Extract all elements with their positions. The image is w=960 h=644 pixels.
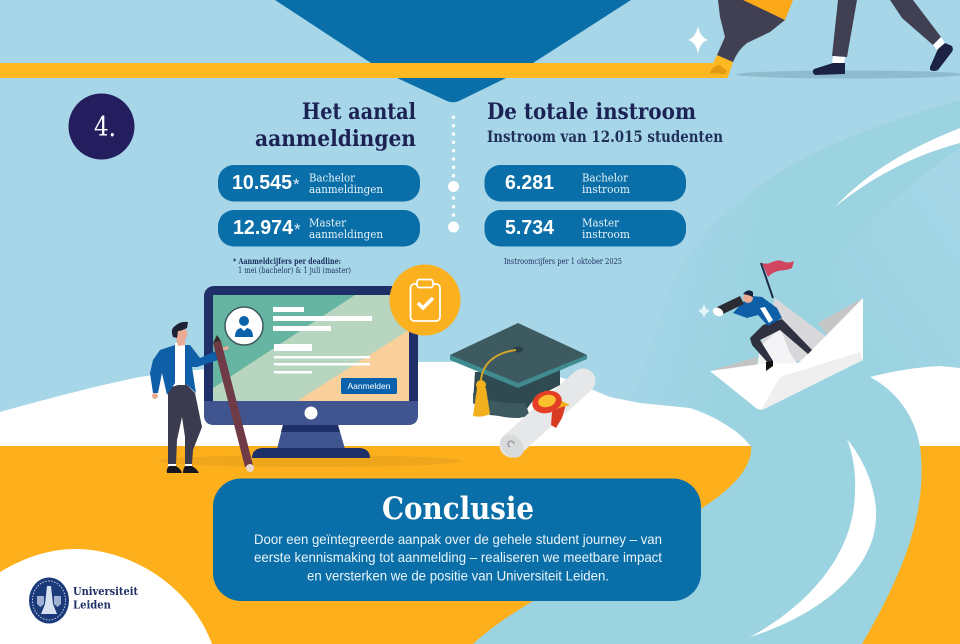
stat pill: bachelor intake: instroom (582, 182, 630, 196)
stat pill: bachelor intake (484, 165, 686, 202)
heading: applications (255, 99, 416, 152)
ground shadow (158, 455, 462, 467)
heading: total intake: Instroom van 12.015 studenten (487, 127, 723, 146)
footnote: applications: * Aanmeldcijfers per deadline: (233, 256, 341, 266)
top arrow shape (275, 0, 631, 102)
stat pill: master applications: Master (309, 216, 346, 230)
conclusion panel: Door een geïntegreerde aanpak over de gehele student journey – van (254, 531, 662, 547)
stat pill: master applications: 12.974 (233, 217, 294, 239)
stat pill: master intake: instroom (582, 227, 630, 241)
stat pill: bachelor applications: * (293, 175, 300, 194)
monitor illustration (204, 286, 418, 458)
graduation cap (450, 323, 587, 418)
logo: Universiteit Leiden: Universiteit (73, 584, 139, 598)
conclusion panel (213, 478, 701, 601)
stat pill: master applications: * (294, 220, 301, 239)
form lines (273, 307, 372, 374)
step number badge: 4. (94, 112, 116, 143)
walking legs with shadow (736, 0, 960, 78)
stat pill: master intake: Master (582, 216, 619, 230)
dotted divider (448, 116, 459, 232)
stat pill: bachelor intake: 6.281 (505, 172, 554, 194)
diploma scroll (496, 381, 583, 462)
conclusion panel: Conclusie (382, 491, 534, 527)
flag (761, 260, 794, 298)
heading: total intake: De totale instroom (487, 99, 696, 125)
heading: total intake (487, 99, 723, 146)
icon: small sparkle (698, 304, 710, 318)
stat pill: bachelor applications: aanmeldingen (309, 182, 384, 196)
stat pill: bachelor applications: 10.545 (232, 172, 292, 194)
stat pill: master applications: aanmeldingen (309, 227, 384, 241)
icon: highlighter marker (708, 0, 793, 77)
footnote: intake: Instroomcijfers per 1 oktober 2025 (504, 257, 622, 266)
conclusion panel: en versterken we de positie van Universiteit Leiden. (307, 568, 609, 584)
stat pill: bachelor intake: Bachelor (582, 170, 628, 184)
icon: clipboard badge (390, 264, 460, 336)
icon: sparkle (688, 26, 708, 54)
apply button (341, 378, 397, 394)
avatar (225, 307, 263, 345)
apply button: Aanmelden (347, 381, 391, 391)
footnote: applications (233, 256, 351, 275)
highlighter line (0, 63, 728, 78)
paper boat (710, 298, 863, 410)
conclusion panel: eerste kennismaking tot aanmelding – realiseren we meetbare impact (254, 549, 662, 565)
heading: applications: aanmeldingen (255, 126, 416, 152)
person with telescope on boat (711, 290, 812, 371)
stat pill: master intake: 5.734 (505, 217, 555, 239)
logo: Universiteit Leiden (29, 578, 139, 624)
stat pill: bachelor applications: Bachelor (309, 170, 355, 184)
footnote: applications: 1 mei (bachelor) & 1 juli (master) (238, 266, 351, 275)
stat pill: master applications (218, 210, 420, 246)
stat pill: bachelor applications (218, 165, 420, 202)
step number badge (68, 94, 134, 160)
stat pill: master intake (484, 210, 686, 246)
logo: Universiteit Leiden: Leiden (73, 598, 112, 612)
man with pencil (150, 322, 254, 473)
heading: applications: Het aantal (302, 99, 416, 125)
